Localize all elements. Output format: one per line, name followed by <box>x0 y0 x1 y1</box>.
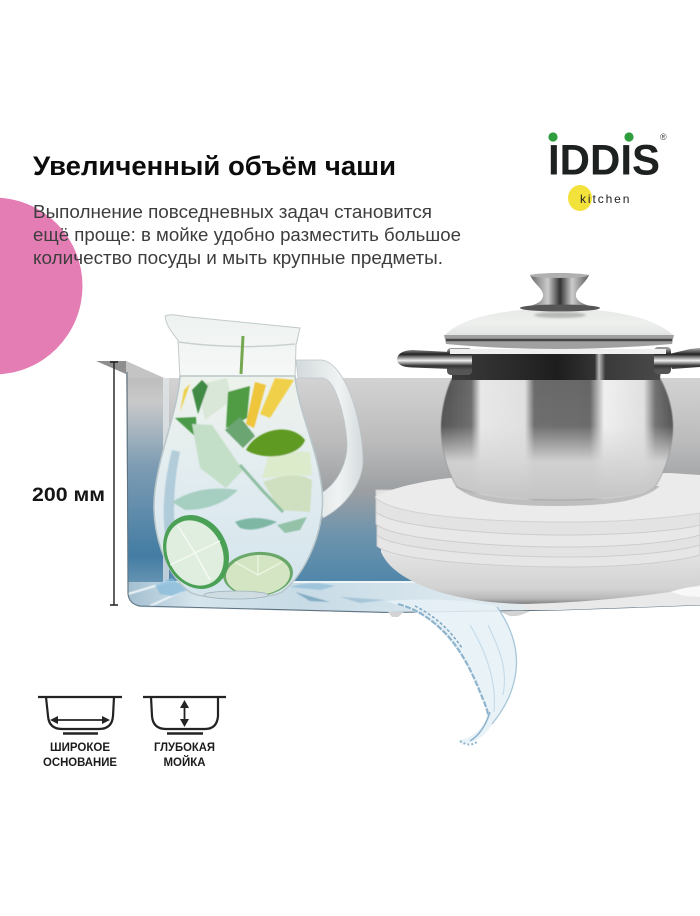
caption: wide base <box>43 742 117 769</box>
caption: deep sink: ГЛУБОКАЯ <box>154 742 215 754</box>
bottom bowl <box>381 540 700 604</box>
icon: deep sink <box>143 697 226 734</box>
pale upper leaves <box>200 378 230 420</box>
pot handles <box>397 350 452 369</box>
water splash on the sink floor <box>155 578 385 603</box>
jug body with water <box>154 376 322 598</box>
description text: количество посуды и мыть крупные предметы. <box>33 247 443 268</box>
dimension line <box>110 362 118 605</box>
jug contents: lime half <box>246 430 305 456</box>
logo: IDDIS kitchen <box>548 132 667 211</box>
jug contents: mint leaves <box>192 380 208 414</box>
jug contents: lemon slices <box>246 382 266 428</box>
icon: wide base sink <box>38 697 122 734</box>
pot <box>397 273 700 506</box>
caption: deep sink <box>154 742 215 769</box>
top plate <box>375 473 700 522</box>
sink lip under plates <box>388 586 700 617</box>
lid knob <box>530 273 590 306</box>
blue reflection in jug <box>163 450 180 534</box>
sink basin <box>96 361 700 613</box>
jug contents: lime slices <box>166 518 226 586</box>
pink circle <box>0 198 82 374</box>
caption: wide base: ОСНОВАНИЕ <box>43 757 117 769</box>
description text: Выполнение повседневных задач становится <box>33 201 432 222</box>
pot body <box>441 378 673 500</box>
handle brackets <box>447 348 472 375</box>
logo: IDDIS kitchen: IDDIS <box>548 136 660 184</box>
jug glass neck <box>165 315 300 378</box>
lid rim <box>444 335 674 349</box>
caption: wide base: ШИРОКОЕ <box>50 742 110 754</box>
description text <box>33 201 461 268</box>
jug <box>152 315 363 599</box>
plates stack <box>375 473 700 604</box>
title: Увеличенный объём чаши <box>33 151 396 181</box>
description text: ещё проще: в мойке удобно разместить большое <box>33 224 461 245</box>
lid dome <box>444 308 674 336</box>
pot dark band <box>452 353 662 380</box>
water stream <box>385 599 517 745</box>
jug base <box>204 591 268 599</box>
depth label: 200 мм <box>32 485 105 506</box>
logo: IDDIS kitchen: kitchen <box>580 192 631 206</box>
stacked plate rims <box>377 520 700 567</box>
pot base <box>455 486 660 506</box>
jug handle <box>296 360 363 518</box>
caption: deep sink: МОЙКА <box>164 756 206 769</box>
logo: IDDIS kitchen: ® <box>660 132 667 142</box>
mint stem <box>241 336 243 374</box>
